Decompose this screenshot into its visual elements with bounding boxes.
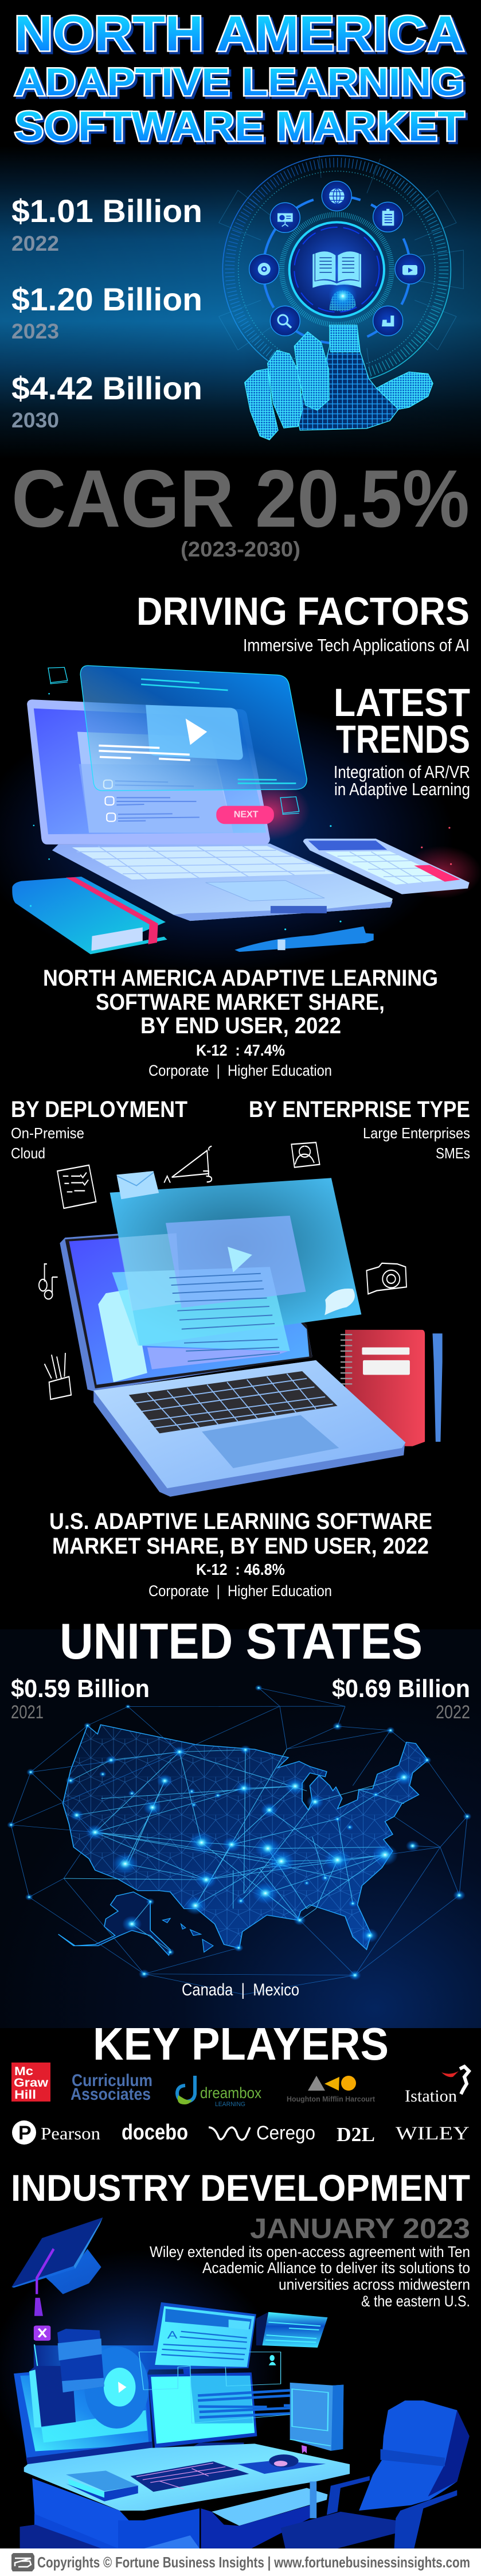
- heading: north america market share: Corporate | Higher Education: [148, 1062, 332, 1079]
- CAGR: (2023-2030): [181, 538, 300, 561]
- alaska and hawaii: [58, 1892, 170, 1955]
- logo: curriculum associates: Curriculum: [72, 2071, 152, 2090]
- sparkles: [30, 693, 342, 930]
- heading: latest trends: LATEST: [334, 680, 470, 725]
- segment: by deployment: On-Premise: [11, 1124, 84, 1142]
- open book: [312, 251, 361, 288]
- left monitor: [14, 2329, 159, 2474]
- panel: key players: [11, 2018, 470, 2146]
- logo: istation: [405, 2067, 469, 2106]
- stat: 2030: $4.42 Billion: [11, 370, 202, 406]
- heading: latest trends: [334, 680, 470, 799]
- illustration: laptop with floating panel: [0, 666, 481, 975]
- heading: driving factors: [136, 589, 470, 655]
- logo: houghton mifflin harcourt: Houghton Mifflin Harcourt: [287, 2095, 376, 2103]
- stat: 2023: $1.20 Billion: [11, 281, 202, 317]
- illustration: graduation cap: [11, 2217, 103, 2316]
- logo: cerego: Cerego: [256, 2122, 315, 2144]
- stat: 2022: $0.69 Billion: [332, 1675, 470, 1703]
- bright network lines: [64, 1749, 404, 1951]
- illustration: laptop with notebook and doodles: [39, 1142, 443, 1497]
- heading: u.s. market share: K-12 : 46.8%: [196, 1561, 285, 1578]
- stat: 2030: 2030: [11, 408, 59, 432]
- logo: houghton mifflin harcourt: [287, 2076, 376, 2103]
- heading: u.s. market share: MARKET SHARE, BY END USER, 2022: [52, 1534, 429, 1559]
- heading: north america market share: NORTH AMERICA ADAPTIVE LEARNING: [43, 966, 438, 991]
- icon: fortune business insights logo: [11, 2553, 34, 2571]
- stat: 2021: 2021: [11, 1702, 44, 1722]
- heading: u.s. market share: Corporate | Higher Education: [148, 1582, 332, 1600]
- logo: docebo: docebo: [122, 2120, 188, 2145]
- heading: north america market share: [43, 966, 438, 1079]
- heading: north america market share: K-12 : 47.4%: [196, 1041, 285, 1059]
- hand mesh: [245, 325, 433, 440]
- date heading: JANUARY 2023: [250, 2213, 470, 2244]
- book: [12, 877, 166, 954]
- button: next: [216, 806, 274, 824]
- logo: mcgraw hill: Mc: [14, 2065, 33, 2078]
- segment: by deployment: Cloud: [11, 1145, 45, 1162]
- logo: mcgraw hill: [11, 2063, 50, 2102]
- heading: north america market share: BY END USER, 2022: [140, 1013, 341, 1038]
- segment: by deployment: [11, 1097, 187, 1162]
- state outline: [63, 1725, 428, 1949]
- calculator: [303, 839, 470, 894]
- logo: istation: Istation: [405, 2087, 457, 2106]
- logo: pearson: P: [18, 2122, 32, 2144]
- title: SOFTWARE MARKET: [14, 104, 464, 150]
- stat: 2022: 2022: [11, 232, 59, 255]
- title: NORTH AMERICA: [14, 6, 464, 61]
- illustration: study desk: [0, 2251, 470, 2548]
- stat: 2030: [11, 370, 202, 432]
- heading: key players: KEY PLAYERS: [93, 2018, 389, 2069]
- heading: united states: UNITED STATES: [60, 1613, 423, 1670]
- logo: dreambox learning: dreambox: [200, 2084, 261, 2102]
- logo: d2l: D2L: [337, 2123, 375, 2146]
- standing book: [290, 2383, 343, 2453]
- logo: curriculum associates: [71, 2071, 152, 2104]
- panel: united states: [0, 1613, 481, 2028]
- stat: 2023: [11, 281, 202, 343]
- logo: dreambox learning: [177, 2076, 261, 2108]
- map: network of the united states: [7, 1685, 471, 1994]
- logo: pearson: Pearson: [41, 2123, 101, 2143]
- button: next: NEXT: [234, 810, 259, 819]
- logo: cerego: [209, 2122, 315, 2144]
- desk: [20, 2443, 350, 2548]
- pen: [432, 1333, 443, 1442]
- panel: market size hero: [0, 146, 481, 459]
- doodle icons: [39, 1142, 406, 1399]
- countries: Canada | Mexico: [182, 1980, 299, 1999]
- logo: mcgraw hill: Hill: [14, 2088, 36, 2102]
- outer network lines: [11, 1688, 467, 1994]
- pen: [234, 927, 374, 952]
- glowing nodes: [7, 1685, 471, 1980]
- icon: hand touching digital book: [219, 155, 463, 440]
- laptop screen: [60, 1227, 312, 1391]
- stat: 2022: [11, 193, 202, 255]
- laptop screen: [27, 699, 270, 845]
- stat: 2022: $1.01 Billion: [11, 193, 202, 229]
- chair: [281, 2400, 470, 2548]
- stat: 2021: [11, 1675, 150, 1722]
- stat: 2022: 2022: [436, 1702, 470, 1722]
- development description: [150, 2243, 470, 2310]
- notebook: [345, 1330, 425, 1446]
- floating panels: [139, 2302, 327, 2423]
- small outline books: [48, 667, 68, 684]
- segment: by enterprise type: [249, 1097, 470, 1162]
- logo: mcgraw hill: Graw: [14, 2076, 49, 2089]
- heading: u.s. market share: U.S. ADAPTIVE LEARNING SOFTWARE: [49, 1509, 432, 1534]
- floating panels: A: [167, 2329, 178, 2341]
- laptop base: [93, 1360, 405, 1497]
- logo: wiley: WILEY: [396, 2123, 470, 2144]
- title: [14, 6, 464, 150]
- stat: 2021: $0.59 Billion: [11, 1675, 150, 1703]
- right monitor: [148, 2365, 290, 2456]
- logo: curriculum associates: Associates: [71, 2085, 151, 2104]
- panel: industry development: [0, 2167, 470, 2548]
- heading: north america market share: SOFTWARE MARKET SHARE,: [96, 990, 385, 1015]
- logo: dreambox learning: LEARNING: [215, 2101, 245, 2108]
- title: ADAPTIVE LEARNING: [14, 60, 464, 104]
- stat: 2023: 2023: [11, 320, 59, 343]
- floating panels: [110, 1178, 361, 1345]
- badge: close: [34, 2326, 50, 2341]
- segment: by enterprise type: SMEs: [436, 1145, 470, 1162]
- stat: 2022: [332, 1675, 470, 1722]
- laptop base: [52, 843, 393, 921]
- footer: [0, 2548, 481, 2576]
- rings: [219, 155, 463, 384]
- orbit icons: [249, 181, 425, 336]
- segment: by deployment: BY DEPLOYMENT: [11, 1097, 187, 1122]
- floating glass panel: [80, 666, 307, 791]
- segment: by enterprise type: Large Enterprises: [363, 1124, 470, 1142]
- heading: u.s. market share: [49, 1509, 432, 1600]
- heading: industry development: INDUSTRY DEVELOPMENT: [11, 2167, 470, 2209]
- logo: pearson: [12, 2120, 101, 2145]
